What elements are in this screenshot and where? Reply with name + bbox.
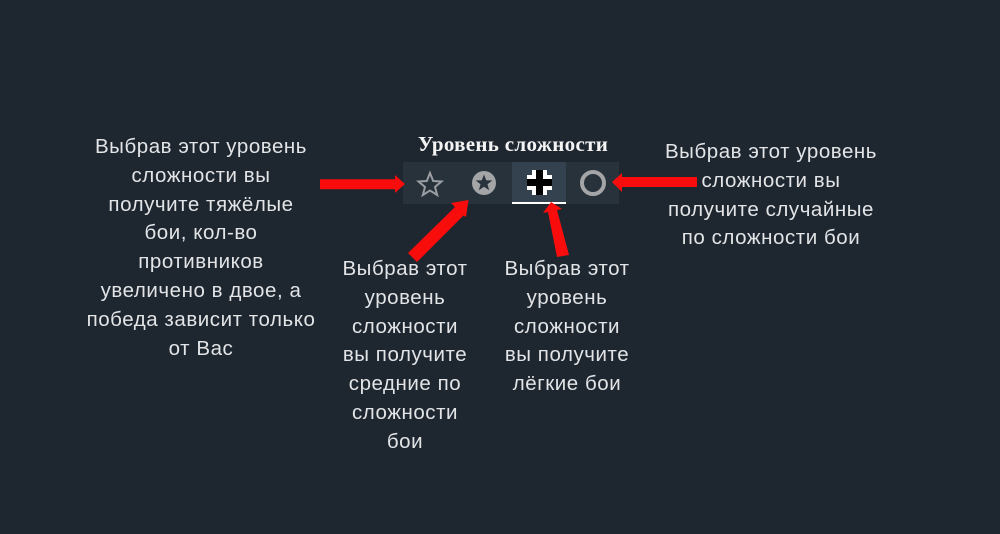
text block: easy description: Выбрав этот — [504, 257, 630, 280]
arrow: to cross — [543, 202, 569, 257]
text block: easy description — [504, 257, 630, 395]
text block: left description: Выбрав этот уровень — [95, 135, 307, 158]
text block: medium description: средние по — [349, 372, 461, 395]
text block: medium description: сложности — [352, 315, 458, 338]
text block: right description: по сложности бои — [682, 226, 860, 249]
arrow: to outlined star — [320, 175, 405, 193]
text block: medium description: вы получите — [343, 343, 467, 366]
text block: left description: противников — [138, 250, 264, 273]
arrow: to filled star — [408, 200, 468, 262]
arrow: to ring — [612, 173, 697, 192]
icon: filled star in circle — [472, 171, 496, 195]
text block: right description — [665, 140, 877, 249]
text block: medium description: Выбрав этот — [342, 257, 468, 280]
text block: right description: Выбрав этот уровень — [665, 140, 877, 163]
text block: left description: увеличено в двое, а — [101, 279, 301, 302]
text block: left description: победа зависит только — [87, 308, 315, 331]
icon: ring — [582, 172, 604, 194]
text block: right description: сложности вы — [701, 169, 841, 192]
text block: medium description — [342, 257, 468, 453]
text block: left description: от Вас — [169, 337, 233, 360]
text block: easy description: вы получите — [505, 343, 629, 366]
text block: left description — [87, 135, 315, 360]
heading: difficulty level: Уровень сложности — [418, 132, 608, 156]
text block: left description: получите тяжёлые — [108, 193, 294, 216]
text block: medium description: сложности — [352, 401, 458, 424]
text block: left description: бои, кол-во — [144, 221, 258, 244]
text block: right description: получите случайные — [668, 198, 874, 221]
text block: left description: сложности вы — [131, 164, 271, 187]
text block: medium description: уровень — [365, 286, 445, 309]
panel: selected difficulty highlight — [512, 162, 566, 204]
icon: outlined star — [418, 173, 442, 195]
text block: medium description: бои — [387, 430, 423, 453]
text block: easy description: уровень — [527, 286, 607, 309]
text block: easy description: лёгкие бои — [513, 372, 621, 395]
text block: easy description: сложности — [514, 315, 620, 338]
icon: black and white cross — [527, 170, 552, 195]
panel: difficulty selector background — [403, 162, 619, 204]
